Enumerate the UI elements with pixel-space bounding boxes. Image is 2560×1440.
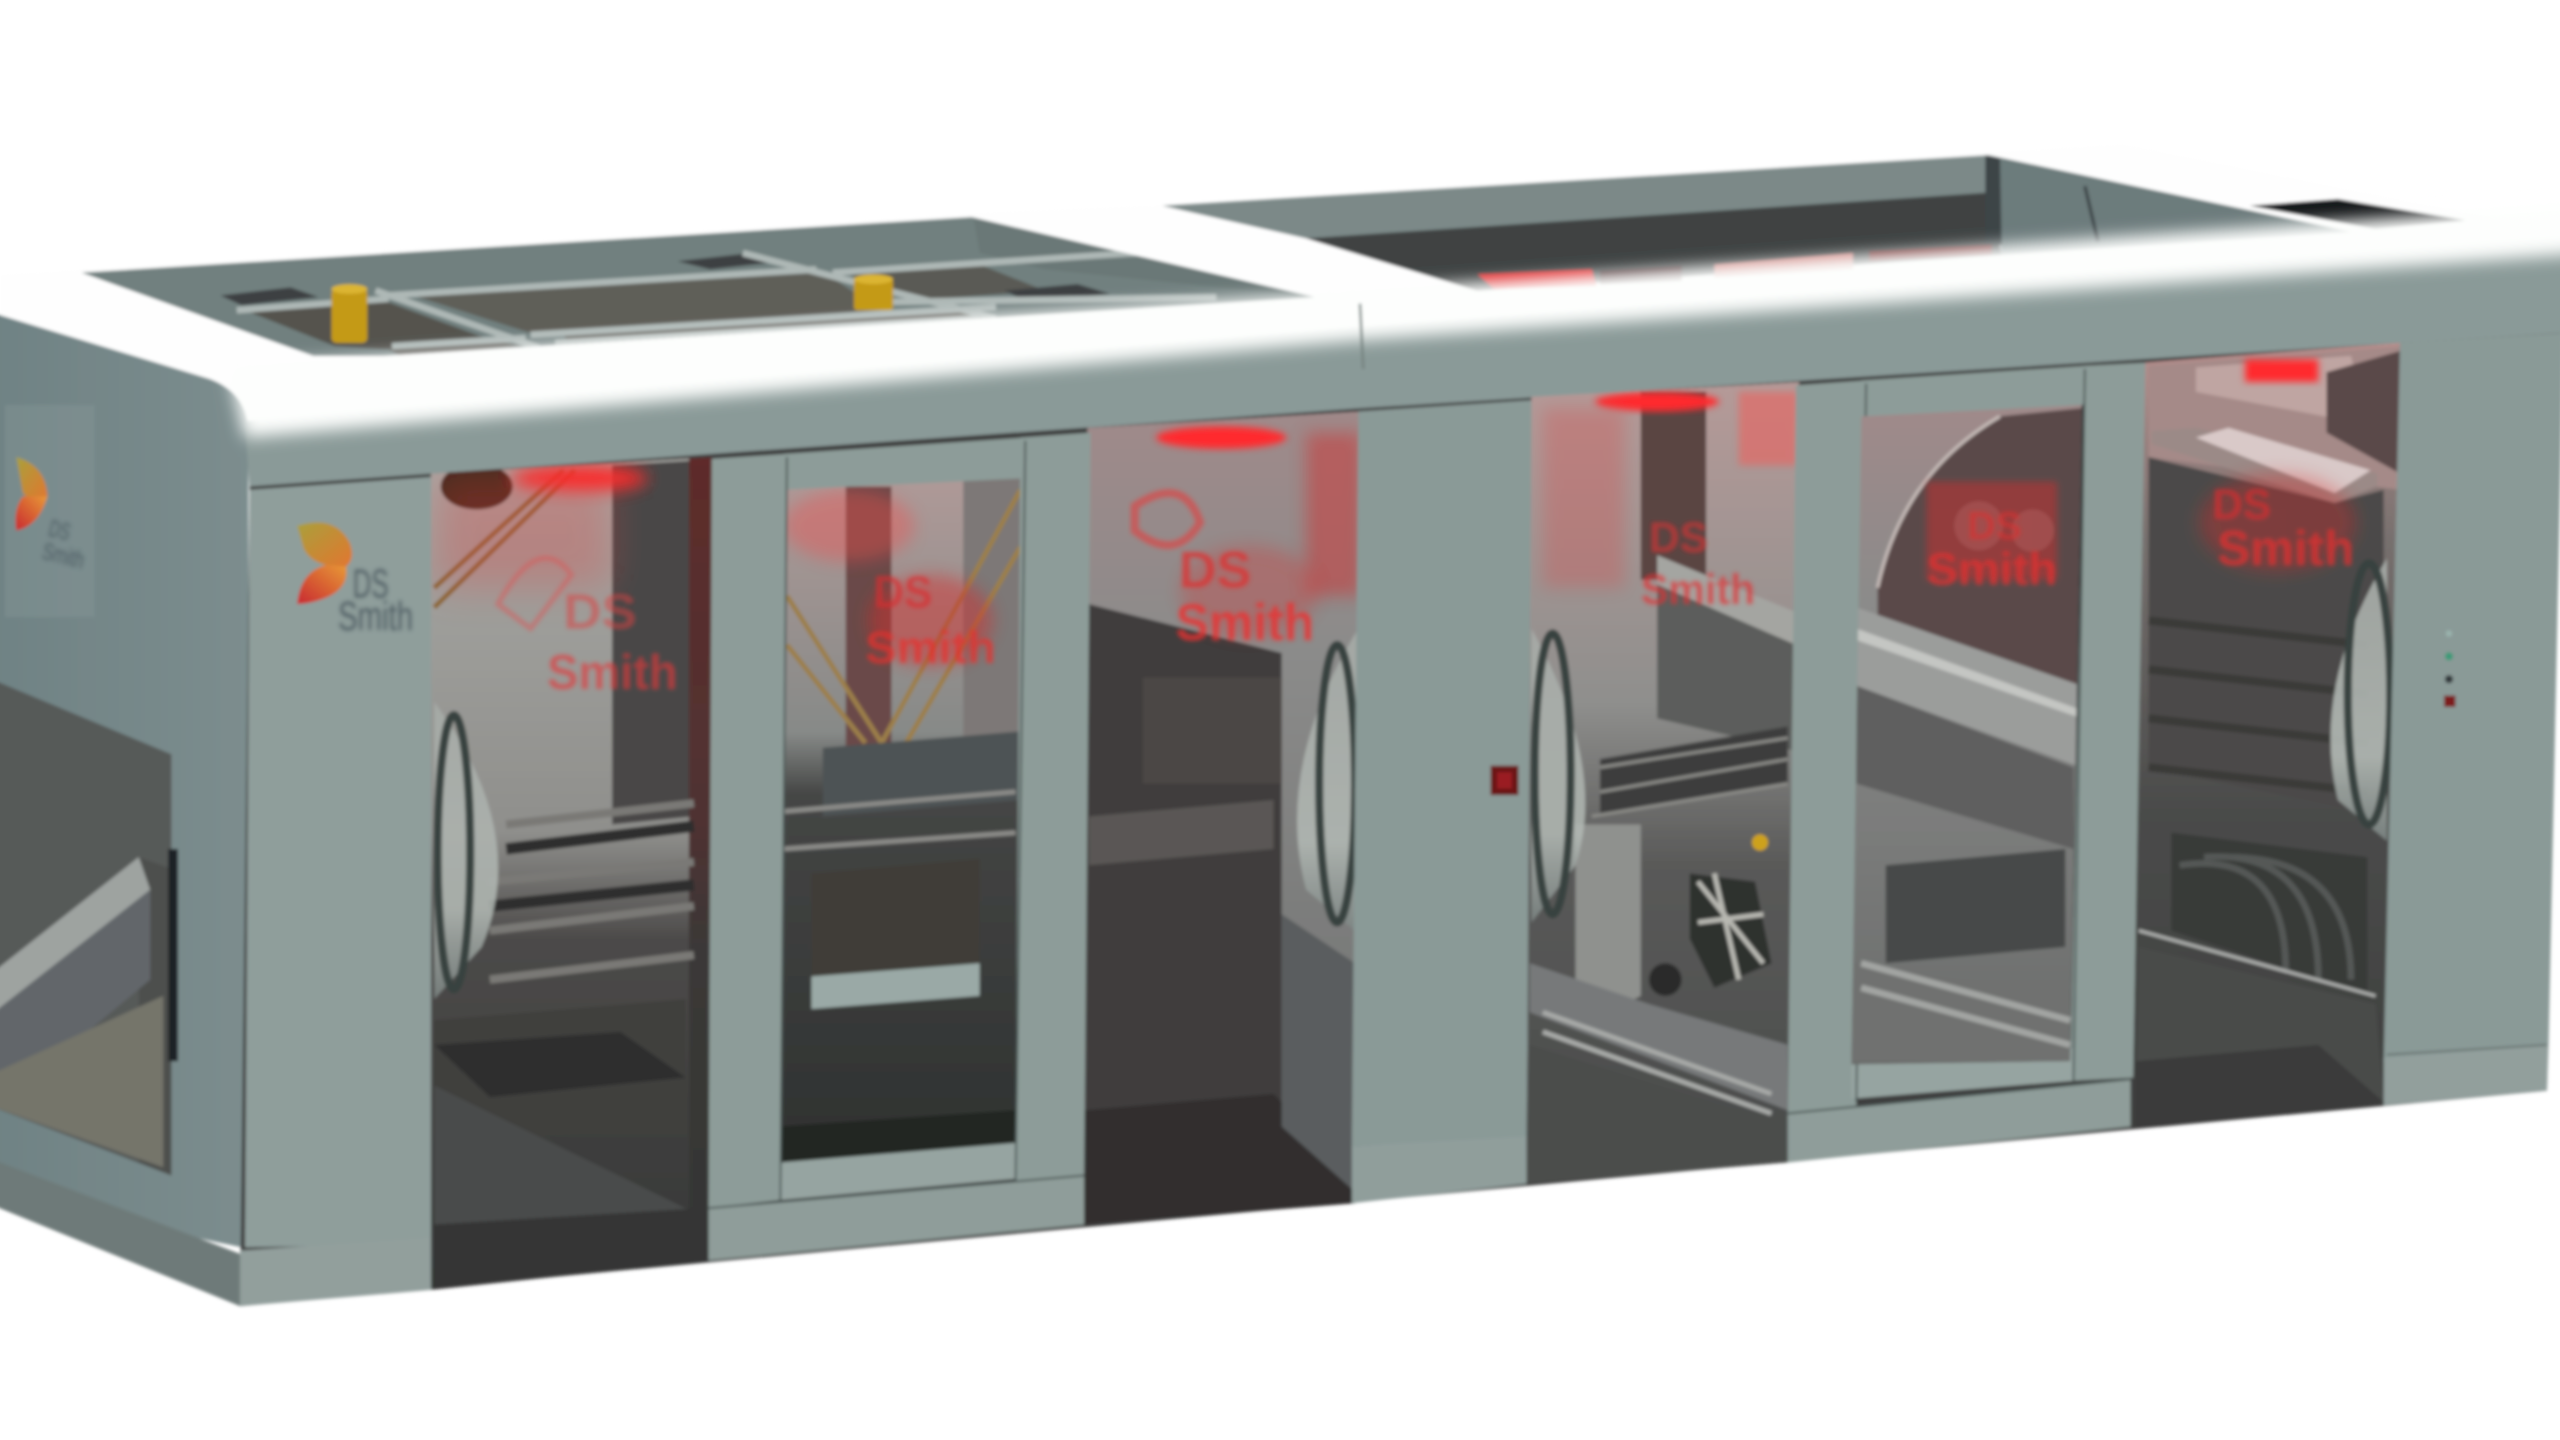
top deck surface — [0, 144, 2560, 465]
left top opening with frame — [82, 216, 1314, 356]
window 4: folding machine interior: Smith — [1641, 566, 1755, 613]
door handle window 3 — [1297, 629, 1358, 934]
window 5: rollers and wheel: Smith — [1927, 543, 2057, 594]
window 5: rollers and wheel: DS — [1967, 505, 2022, 548]
window 1: robot cell: DS — [563, 586, 637, 640]
pillars, frames and bases between windows — [709, 362, 2149, 1260]
window 2: delta robot and sheet: DS — [873, 566, 932, 617]
side logo: DS — [46, 515, 73, 546]
window 6: sheet feeder — [2132, 343, 2400, 1127]
window 3: machine interior: DS — [1179, 542, 1251, 600]
window 3: machine interior — [1084, 411, 1362, 1224]
window 6: sheet feeder: Smith — [2217, 522, 2354, 576]
left side face — [0, 310, 250, 1306]
window 6: sheet feeder: DS — [2212, 481, 2271, 528]
front left panel with logo — [240, 477, 434, 1306]
black vent — [2250, 199, 2465, 229]
front left panel with logo: Smith — [338, 593, 413, 639]
window 2: delta robot and sheet — [780, 469, 1022, 1162]
front left panel with logo: DS — [353, 561, 389, 607]
middle panel with red stop button — [1352, 400, 1535, 1203]
window 1: robot cell: Smith — [547, 646, 678, 700]
door handle window 4 — [1531, 629, 1585, 922]
window 4: folding machine interior — [1527, 382, 1799, 1184]
right top opening — [1162, 155, 2351, 291]
door handle window 6 — [2331, 558, 2390, 841]
side logo: Smith — [39, 538, 87, 574]
side loading opening with chute — [0, 676, 178, 1176]
window 4: folding machine interior: DS — [1649, 514, 1708, 561]
window 2: delta robot and sheet: Smith — [865, 622, 996, 673]
side logo — [16, 457, 87, 574]
window 5: rollers and wheel — [1851, 405, 2082, 1064]
yellow sensor posts — [331, 274, 893, 343]
window 3: machine interior: Smith — [1176, 594, 1314, 652]
front fascia — [229, 202, 2560, 493]
window 1: robot cell — [431, 457, 712, 1290]
right panel with status lights — [2384, 333, 2560, 1105]
door handle window 1 — [434, 702, 498, 999]
front wall underlay — [240, 333, 2560, 1306]
